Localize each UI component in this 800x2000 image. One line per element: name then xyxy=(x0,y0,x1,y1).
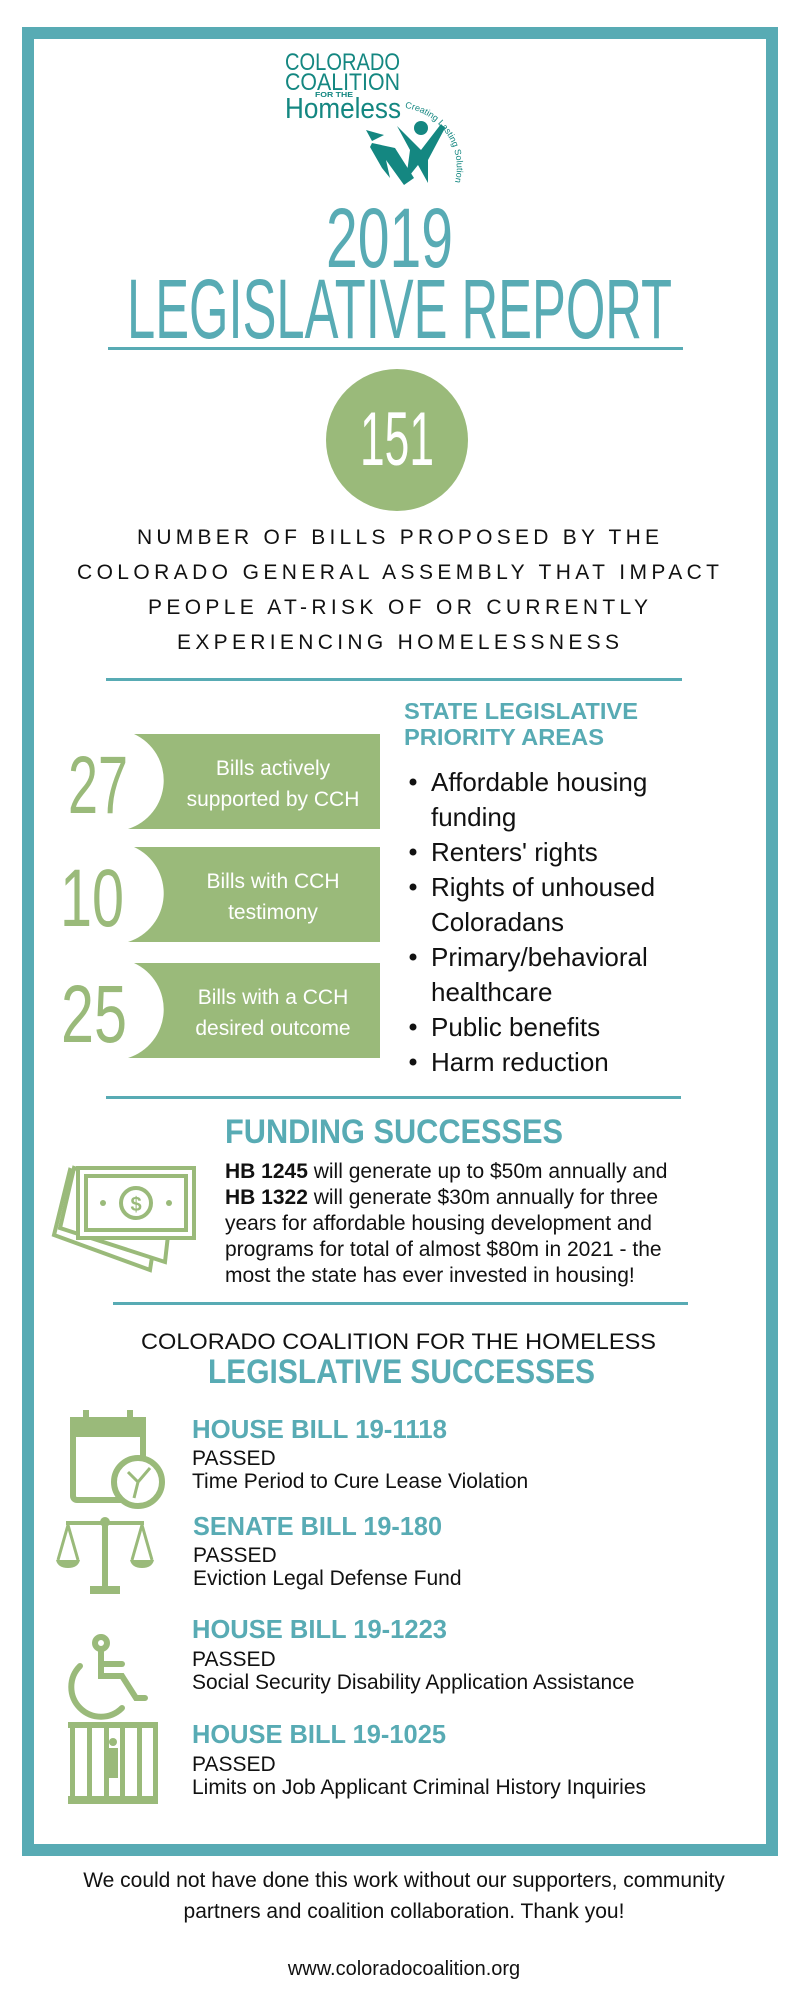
bar: 25 xyxy=(61,963,380,1060)
title: 2019: 2019 xyxy=(326,191,453,285)
bill: HB 19-1223: HOUSE BILL 19-1223 xyxy=(192,1614,447,1644)
icon: scales xyxy=(56,1517,154,1594)
bar: 27: supported by CCH xyxy=(187,788,359,811)
successes heading: COLORADO COALITION FOR THE HOMELESS xyxy=(141,1329,656,1354)
priority areas list: Primary/behavioral xyxy=(431,942,648,972)
icon: money: $ xyxy=(130,1194,142,1216)
icon: wheelchair xyxy=(71,1637,145,1717)
bill: HB 19-1025: Limits on Job Applicant Criminal History Inquiries xyxy=(192,1776,646,1799)
bill: HB 19-1223: PASSED xyxy=(192,1648,276,1671)
priority areas list: Rights of unhoused xyxy=(431,872,655,902)
logo: FOR THE xyxy=(315,92,353,99)
bar: 27 xyxy=(68,734,380,831)
logo: Homeless xyxy=(285,93,401,125)
description of 151: COLORADO GENERAL ASSEMBLY THAT IMPACT xyxy=(77,561,719,584)
priority areas heading: PRIORITY AREAS xyxy=(404,724,604,750)
bill: HB 19-1025 xyxy=(192,1719,646,1799)
bill: HB 19-1223 xyxy=(192,1614,634,1694)
bar: 25: 25 xyxy=(61,969,127,1060)
bar: 10: 10 xyxy=(60,853,124,944)
bar: 27: Bills actively xyxy=(216,757,331,780)
successes heading xyxy=(141,1329,656,1391)
bill: HB 19-1025: HOUSE BILL 19-1025 xyxy=(192,1719,446,1749)
stat circle 151 xyxy=(326,369,468,511)
bar: 10 xyxy=(60,847,380,944)
logo xyxy=(285,49,464,185)
bill: HB 19-1118: PASSED xyxy=(192,1447,276,1470)
bar: 10: Bills with CCH xyxy=(206,870,340,893)
funding text: HB 1322 will generate $30m annually for three xyxy=(225,1186,658,1209)
priority areas list: Harm reduction xyxy=(431,1047,609,1077)
bill: HB 19-1118: Time Period to Cure Lease Violation xyxy=(192,1470,528,1493)
priority areas list: Renters' rights xyxy=(431,837,598,867)
icon: calendar clock xyxy=(73,1410,162,1506)
logo: COALITION xyxy=(285,69,400,96)
stat circle 151: 151 xyxy=(360,397,434,482)
funding text: HB 1245 will generate up to $50m annually and xyxy=(225,1160,667,1183)
funding heading: FUNDING SUCCESSES xyxy=(225,1113,563,1151)
bar: 25: desired outcome xyxy=(195,1017,351,1040)
stat bars xyxy=(60,734,380,1060)
bill: SB 19-180: PASSED xyxy=(193,1544,277,1567)
bill: SB 19-180 xyxy=(193,1511,462,1590)
bar: 25: Bills with a CCH xyxy=(198,986,348,1009)
priority areas heading: STATE LEGISLATIVE xyxy=(404,698,638,724)
bill: HB 19-1118 xyxy=(192,1414,528,1493)
successes heading: LEGISLATIVE SUCCESSES xyxy=(208,1353,595,1391)
description of 151 xyxy=(77,526,719,654)
funding text: years for affordable housing development and xyxy=(225,1212,652,1235)
footer thank you xyxy=(83,1869,725,1923)
bar: 27: 27 xyxy=(68,740,128,831)
priority areas list: Public benefits xyxy=(431,1012,600,1042)
priority areas list: funding xyxy=(431,802,516,832)
icon: jail xyxy=(68,1722,158,1804)
description of 151: PEOPLE AT-RISK OF OR CURRENTLY xyxy=(148,596,648,619)
description of 151: NUMBER OF BILLS PROPOSED BY THE xyxy=(137,526,659,549)
icon: money xyxy=(54,1168,194,1270)
priority areas list: Affordable housing xyxy=(431,767,647,797)
priority areas heading xyxy=(404,698,638,750)
footer thank you: partners and coalition collaboration. Thank you! xyxy=(184,1900,624,1923)
bar: 10: testimony xyxy=(228,901,318,924)
footer url: www.coloradocoalition.org xyxy=(287,1958,520,1980)
bill: SB 19-180: SENATE BILL 19-180 xyxy=(193,1511,442,1541)
funding text xyxy=(225,1160,667,1287)
priority areas list xyxy=(410,767,655,1077)
priority areas list: Coloradans xyxy=(431,907,564,937)
bill: HB 19-1223: Social Security Disability Application Assistance xyxy=(192,1671,634,1694)
funding text: programs for total of almost $80m in 2021 - the xyxy=(225,1238,662,1261)
bill: SB 19-180: Eviction Legal Defense Fund xyxy=(193,1567,462,1590)
bill: HB 19-1025: PASSED xyxy=(192,1753,276,1776)
description of 151: EXPERIENCING HOMELESSNESS xyxy=(177,631,619,654)
bill: HB 19-1118: HOUSE BILL 19-1118 xyxy=(192,1414,447,1444)
logo: COLORADO xyxy=(285,49,400,76)
priority areas list: healthcare xyxy=(431,977,552,1007)
funding text: most the state has ever invested in housing! xyxy=(225,1264,635,1287)
footer thank you: We could not have done this work without our supporters, community xyxy=(83,1869,725,1892)
